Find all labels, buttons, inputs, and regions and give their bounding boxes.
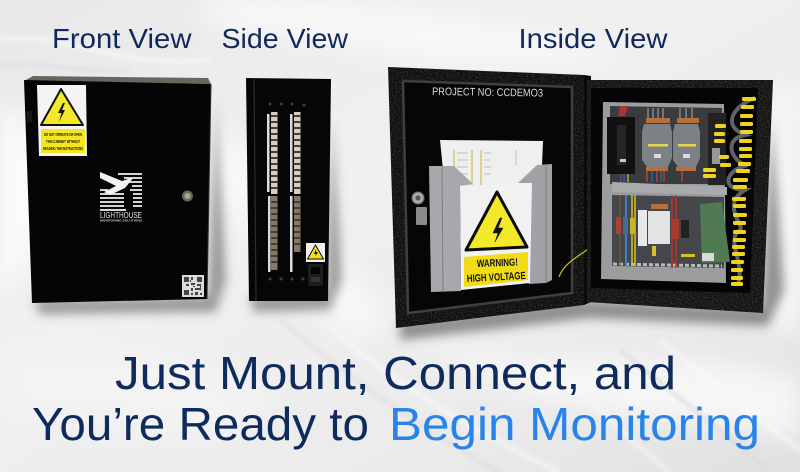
warning sign: high voltage: HIGH VOLTAGE — [467, 270, 526, 285]
lock — [182, 190, 193, 202]
gray cables — [728, 98, 755, 285]
side view cabinet — [246, 78, 342, 312]
metal document holder — [429, 164, 552, 292]
ground wire — [559, 248, 590, 277]
backplate — [601, 102, 726, 283]
inside view: shadow — [400, 120, 784, 340]
heading: Inside View: Inside View — [518, 23, 668, 54]
title line 2: You’re Ready to — [32, 398, 369, 450]
inside view: cabinet interior — [587, 80, 773, 313]
document sheet — [440, 140, 543, 190]
power supply — [607, 106, 635, 182]
yellow labelled wires — [703, 97, 756, 286]
QR code — [182, 275, 204, 297]
inside view: door — [388, 67, 591, 328]
warning sign: high voltage — [460, 183, 532, 290]
warning label: THIS CABINET WITHOUT — [46, 139, 80, 144]
relay module — [708, 113, 726, 185]
I/O modules — [642, 108, 700, 182]
terminal strips — [267, 112, 301, 272]
lower DIN components — [616, 195, 730, 268]
title line 1: Just Mount, Connect, and — [115, 347, 676, 399]
door latch — [412, 192, 427, 225]
front view cabinet — [24, 76, 226, 314]
warning sign: high voltage: WARNING! — [477, 257, 518, 270]
Lighthouse logo: LIGHTHOUSE — [100, 211, 142, 220]
Lighthouse logo — [100, 172, 142, 222]
Lighthouse logo: MONITORING SOLUTIONS — [100, 218, 142, 222]
project number: PROJECT NO: CCDEMO3 — [432, 86, 543, 100]
heading: Side View: Side View — [222, 23, 349, 54]
side warning label — [306, 243, 325, 262]
warning label: READING THE INSTRUCTIONS — [43, 146, 83, 151]
warning label: DO NOT OPERATE OR OPEN — [44, 132, 82, 137]
title highlight: Begin Monitoring: Begin Monitoring — [389, 398, 760, 450]
warning label — [37, 85, 87, 156]
power socket — [308, 264, 323, 286]
heading: Front View: Front View — [52, 23, 192, 54]
